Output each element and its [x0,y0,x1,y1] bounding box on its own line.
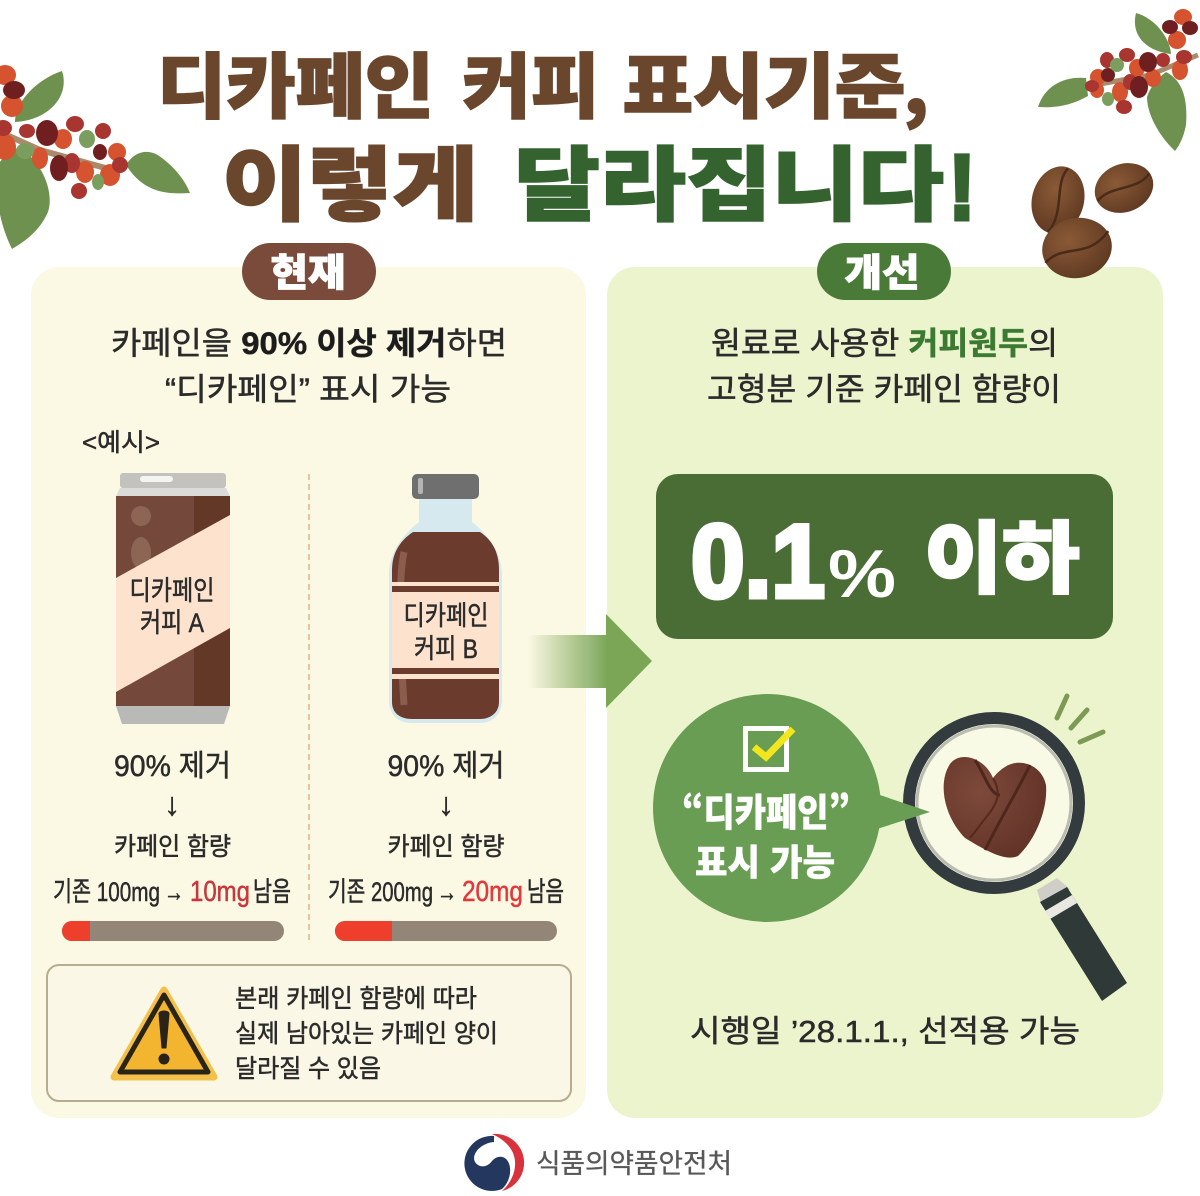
title: , [903,31,929,133]
icon: bottle B [389,474,502,723]
product B details: 카페인 함량 [388,833,504,861]
callout: decaf label allowed bubble: “디카페인” [682,782,850,837]
badge: current: 현재 [270,242,346,297]
text: example label: <예시> [82,429,160,457]
icon: shine ticks [1057,696,1103,742]
product B details: 90% 제거 [388,750,504,783]
title: 이렇게 [222,121,478,238]
divider: between products [308,474,310,940]
icon: checkbox [746,728,793,770]
icon: bottle B: 디카페인 [404,601,488,631]
icon: warning triangle [114,990,214,1077]
arrow: current to improved [528,614,652,708]
product A details: 카페인 함량 [114,833,231,861]
icon: magnifying glass with heart bean [909,718,1127,1001]
product A details [53,750,291,908]
product B details: → [437,877,457,907]
product A details: 기존 100mg [53,877,160,907]
callout: 0.1% or less: 이하 [924,497,1080,609]
bar: product A caffeine remaining [62,921,284,941]
icon: bottle B: 커피 B [414,634,478,664]
callout: 0.1% or less: 0.1 [691,504,825,620]
product B details: ↓ [438,786,454,822]
icon: taegeuk emblem [464,1134,524,1191]
product A details: → [164,877,184,907]
text: improved rule: 고형분 기준 카페인 함량이 [707,371,1061,407]
icon: right coffee branch [1038,9,1198,151]
title: 커피 [462,31,600,133]
product A details: 10mg [190,876,250,908]
text: improved rule [707,325,1061,407]
panel: improved standard background [607,267,1163,1118]
callout: warning [47,965,571,1101]
title: ! [949,137,975,239]
callout: warning: 달라질 수 있음 [235,1055,381,1083]
product B details: 20mg [462,876,523,908]
text: current rule: 카페인을 90% 이상 제거 하면 [111,325,507,361]
product A details: ↓ [164,786,180,822]
callout: warning: 본래 카페인 함량에 따라 [235,985,477,1013]
product A details: 90% 제거 [114,750,231,783]
product A details: 남음 [253,877,291,907]
callout: 0.1% or less [656,474,1113,639]
bar: product B caffeine remaining [335,921,557,941]
badge: current [242,242,376,300]
footer: ministry logo [464,1134,732,1191]
badge: improved: 개선 [844,242,920,297]
title [157,31,975,239]
text: effective date: 시행일 ’28.1.1., 선적용 가능 [690,1014,1080,1049]
icon: can A: 커피 A [140,608,204,638]
badge: improved [817,242,951,300]
product B details: 남음 [527,877,564,907]
icon: left coffee branch [0,65,190,249]
product B details: 기존 200mg [328,877,433,907]
title: 달라집니다 [514,121,944,238]
title: 디카페인 [157,31,434,133]
text: current rule: “디카페인” 표시 가능 [165,371,451,407]
footer: ministry logo: 식품의약품안전처 [536,1149,732,1179]
panel: current standard background [31,267,586,1118]
product B details [328,750,564,908]
title: 표시기준 [622,31,906,133]
icon: coffee beans [1025,155,1161,285]
callout: warning: 실제 남아있는 카페인 양이 [235,1020,498,1048]
callout: decaf label allowed bubble: 표시 가능 [695,834,835,886]
callout: 0.1% or less: % [828,536,896,612]
icon: heart-shaped coffee bean [944,757,1046,858]
icon: can A: 디카페인 [130,576,214,606]
icon: can A [116,473,230,724]
text: current rule [111,325,507,407]
callout: decaf label allowed bubble [653,694,930,922]
text: improved rule: 원료로 사용한 커피원두의 [711,325,1058,361]
